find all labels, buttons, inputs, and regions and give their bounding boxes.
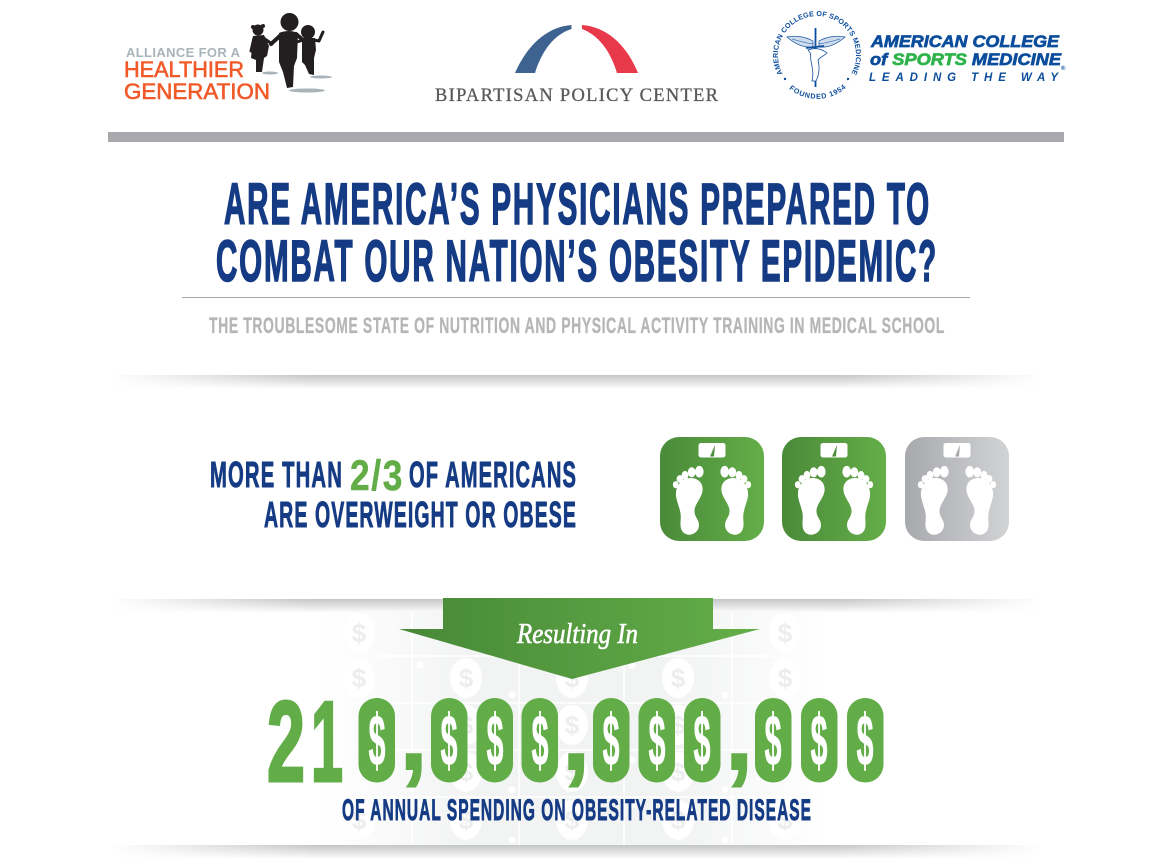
statistic text: 2/3 xyxy=(350,452,404,500)
background: dollar bill pattern: $ xyxy=(565,663,580,693)
icon: red arc xyxy=(582,25,638,73)
dollar signs: $ xyxy=(810,701,828,781)
statistic text: MORE THAN xyxy=(210,454,343,495)
background: dollar bill pattern: $ xyxy=(352,618,367,648)
icon: green scale 1 xyxy=(660,437,764,541)
dollar signs: $ xyxy=(694,701,710,781)
logo wordmark xyxy=(869,32,1066,84)
logo wordmark: BIPARTISAN POLICY CENTER xyxy=(435,86,719,106)
logo: American College of Sports Medicine xyxy=(773,11,1066,99)
digits 21: 1 xyxy=(311,679,343,806)
statistic: two thirds overweight xyxy=(210,437,1009,541)
arrow label: Resulting In xyxy=(516,618,638,650)
big number: 210 billion dollars: $ xyxy=(856,701,874,781)
dollar signs: $ xyxy=(532,701,548,781)
logo wordmark: of SPORTS MEDICINE xyxy=(870,50,1062,69)
dollar signs: $ xyxy=(602,701,620,781)
zeros as dollar pills xyxy=(358,698,884,782)
seal: AMERICAN COLLEGE OF SPORTS MEDICINE xyxy=(773,11,861,76)
logo wordmark: HEALTHIER xyxy=(124,57,244,82)
background: dollar bill pattern: $ xyxy=(459,805,474,835)
background: dollar bill pattern: $ xyxy=(459,663,474,693)
big number: 210 billion dollars xyxy=(267,669,884,806)
logo wordmark: ALLIANCE FOR A xyxy=(126,45,241,60)
statistic text: OF AMERICANS xyxy=(409,454,577,495)
dollar signs: $ xyxy=(764,701,782,781)
logo wordmark: GENERATION xyxy=(124,79,270,104)
background: dollar bill pattern: $ xyxy=(565,757,580,787)
logo wordmark: ® xyxy=(1061,65,1066,72)
logo wordmark: LEADING THE WAY xyxy=(869,72,1059,84)
title xyxy=(216,172,938,294)
background: dollar bill pattern: $ xyxy=(565,805,580,835)
section shadow divider xyxy=(138,375,1014,387)
statistic text: ARE OVERWEIGHT OR OBESE xyxy=(264,494,577,535)
dollar signs: $ xyxy=(648,701,666,781)
background: dollar bill pattern: $ xyxy=(671,710,686,740)
logo: Bipartisan Policy Center xyxy=(435,25,719,106)
icon: blue arc xyxy=(515,25,572,73)
seal: FOUNDED 1954 xyxy=(789,84,846,99)
dollar signs xyxy=(368,701,874,781)
header divider bar xyxy=(108,132,1064,142)
background: dollar bill pattern: $ xyxy=(352,805,367,835)
background: dollar bill pattern: $ xyxy=(778,663,793,693)
background: dollar bill pattern: $ xyxy=(671,805,686,835)
background: dollar bill pattern: $ xyxy=(459,710,474,740)
commas: , xyxy=(560,669,592,794)
background: dollar bill pattern: $ xyxy=(671,757,686,787)
dollar signs: $ xyxy=(368,701,386,781)
logo: Alliance for a Healthier Generation xyxy=(124,13,332,104)
section shadow divider xyxy=(138,599,1014,611)
commas xyxy=(398,669,755,794)
background: dollar bill pattern: $ xyxy=(565,710,580,740)
background: dollar bill pattern: $ xyxy=(778,618,793,648)
section shadow divider xyxy=(138,845,1014,857)
arrow shape xyxy=(399,598,760,679)
background: dollar bill pattern: $ xyxy=(778,805,793,835)
background: dollar bill pattern xyxy=(320,612,830,845)
commas: , xyxy=(398,669,429,794)
dollar signs: $ xyxy=(440,701,458,781)
icon: green scale 2 xyxy=(782,437,886,541)
background: dollar bill pattern: $ xyxy=(352,663,367,693)
icon: gray scale xyxy=(905,437,1009,541)
background: dollar bill pattern: $ xyxy=(459,757,474,787)
icon: running children silhouettes xyxy=(251,13,332,92)
background: dollar bill pattern: $ xyxy=(671,663,686,693)
commas: , xyxy=(724,669,755,794)
logo wordmark: AMERICAN COLLEGE xyxy=(870,32,1060,51)
statistic text xyxy=(210,452,577,535)
arrow: resulting in xyxy=(399,598,760,679)
digits 21: 2 xyxy=(267,679,305,806)
dollar signs: $ xyxy=(486,701,504,781)
logo wordmark xyxy=(124,45,270,104)
